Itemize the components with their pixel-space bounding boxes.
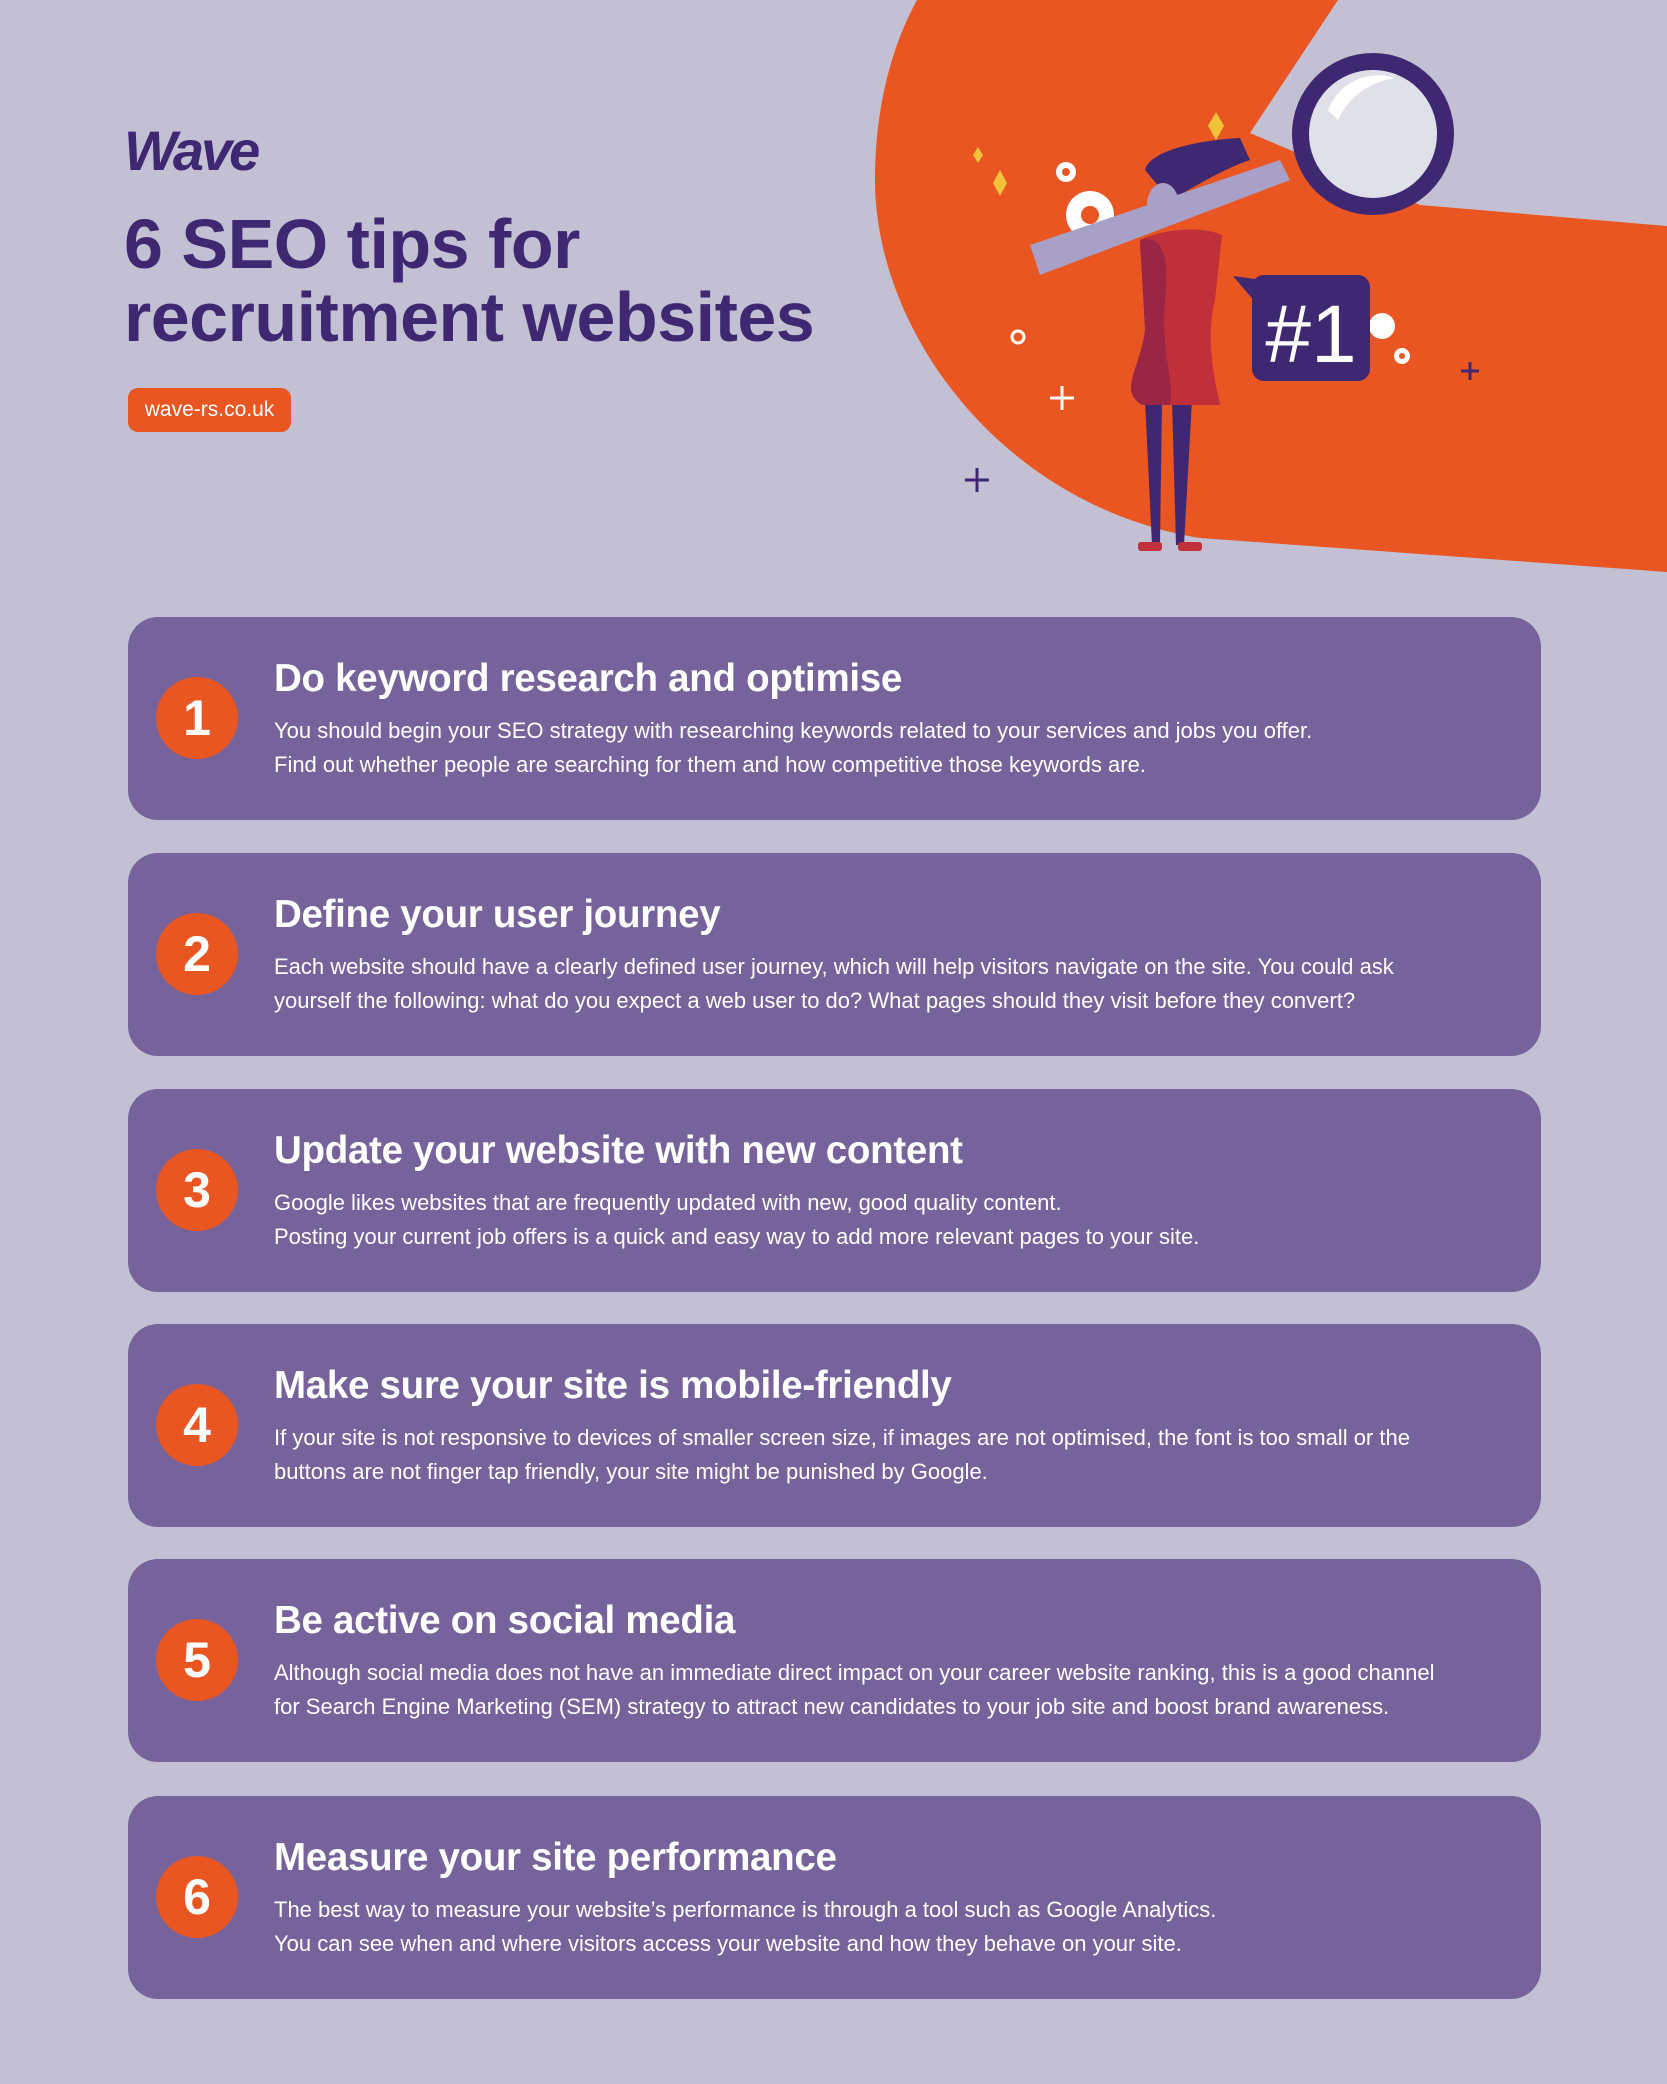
gears xyxy=(1056,162,1410,364)
title xyxy=(124,205,814,356)
heading 6: Measure your site performance xyxy=(274,1836,837,1879)
plus signs and ring xyxy=(965,362,1479,492)
text 3 xyxy=(274,1190,1199,1249)
heading 2: Define your user journey xyxy=(274,893,720,936)
text 1 xyxy=(274,718,1312,777)
badge #1 xyxy=(1233,275,1370,381)
card 3 xyxy=(128,1089,1541,1292)
number 4 xyxy=(156,1384,238,1466)
heading 1: Do keyword research and optimise xyxy=(274,657,902,700)
title: 6 SEO tips for xyxy=(124,205,580,283)
card 5 xyxy=(128,1559,1541,1762)
text 1: Find out whether people are searching for them and how competitive those keywords are. xyxy=(274,752,1146,777)
title: recruitment websites xyxy=(124,278,814,356)
text 3: Posting your current job offers is a quick and easy way to add more relevant pages to your site. xyxy=(274,1224,1199,1249)
number 3 xyxy=(156,1149,238,1231)
number 1: 1 xyxy=(183,690,211,746)
card 1 xyxy=(128,617,1541,820)
card 4 xyxy=(128,1324,1541,1527)
card 6 xyxy=(128,1796,1541,1999)
text 4: buttons are not finger tap friendly, your site might be punished by Google. xyxy=(274,1459,988,1484)
number 2: 2 xyxy=(183,926,211,982)
card 2 xyxy=(128,853,1541,1056)
text 2: Each website should have a clearly defined user journey, which will help visitors navigate on the site. You could ask xyxy=(274,954,1394,979)
badge #1: #1 xyxy=(1265,289,1357,380)
text 5 xyxy=(274,1660,1435,1719)
number 4: 4 xyxy=(183,1397,211,1453)
url button: wave-rs.co.uk xyxy=(145,398,274,421)
text 4 xyxy=(274,1425,1410,1484)
url button xyxy=(128,388,291,432)
heading 5: Be active on social media xyxy=(274,1599,735,1642)
text 4: If your site is not responsive to devices of smaller screen size, if images are not optimised, the font is too small or the xyxy=(274,1425,1410,1450)
text 6 xyxy=(274,1897,1216,1956)
text 6: The best way to measure your website’s performance is through a tool such as Google Analytics. xyxy=(274,1897,1216,1922)
magnifier xyxy=(1292,53,1454,215)
orange shape xyxy=(875,0,1667,572)
heading 4: Make sure your site is mobile-friendly xyxy=(274,1364,952,1407)
number 6: 6 xyxy=(183,1869,211,1925)
number 6 xyxy=(156,1856,238,1938)
heading 3: Update your website with new content xyxy=(274,1129,963,1172)
text 2: yourself the following: what do you expect a web user to do? What pages should they visit before they convert? xyxy=(274,988,1355,1013)
text 2 xyxy=(274,954,1394,1013)
woman legs xyxy=(1145,400,1192,545)
illustration: orange backdrop with woman and magnifier xyxy=(875,0,1667,572)
head and hair xyxy=(1145,138,1250,200)
dress xyxy=(1131,230,1222,405)
telescope xyxy=(1030,160,1290,275)
number 5: 5 xyxy=(183,1632,211,1688)
number 5 xyxy=(156,1619,238,1701)
text 1: You should begin your SEO strategy with researching keywords related to your services and jobs you offer. xyxy=(274,718,1312,743)
text 6: You can see when and where visitors access your website and how they behave on your site. xyxy=(274,1931,1182,1956)
number 2 xyxy=(156,913,238,995)
yellow diamonds xyxy=(973,112,1224,196)
number 1 xyxy=(156,677,238,759)
logo: Wave xyxy=(124,119,257,182)
number 3: 3 xyxy=(183,1162,211,1218)
text 3: Google likes websites that are frequently updated with new, good quality content. xyxy=(274,1190,1062,1215)
text 5: Although social media does not have an immediate direct impact on your career website ranking, this is a good channel xyxy=(274,1660,1435,1685)
text 5: for Search Engine Marketing (SEM) strategy to attract new candidates to your job site and boost brand awareness. xyxy=(274,1694,1389,1719)
